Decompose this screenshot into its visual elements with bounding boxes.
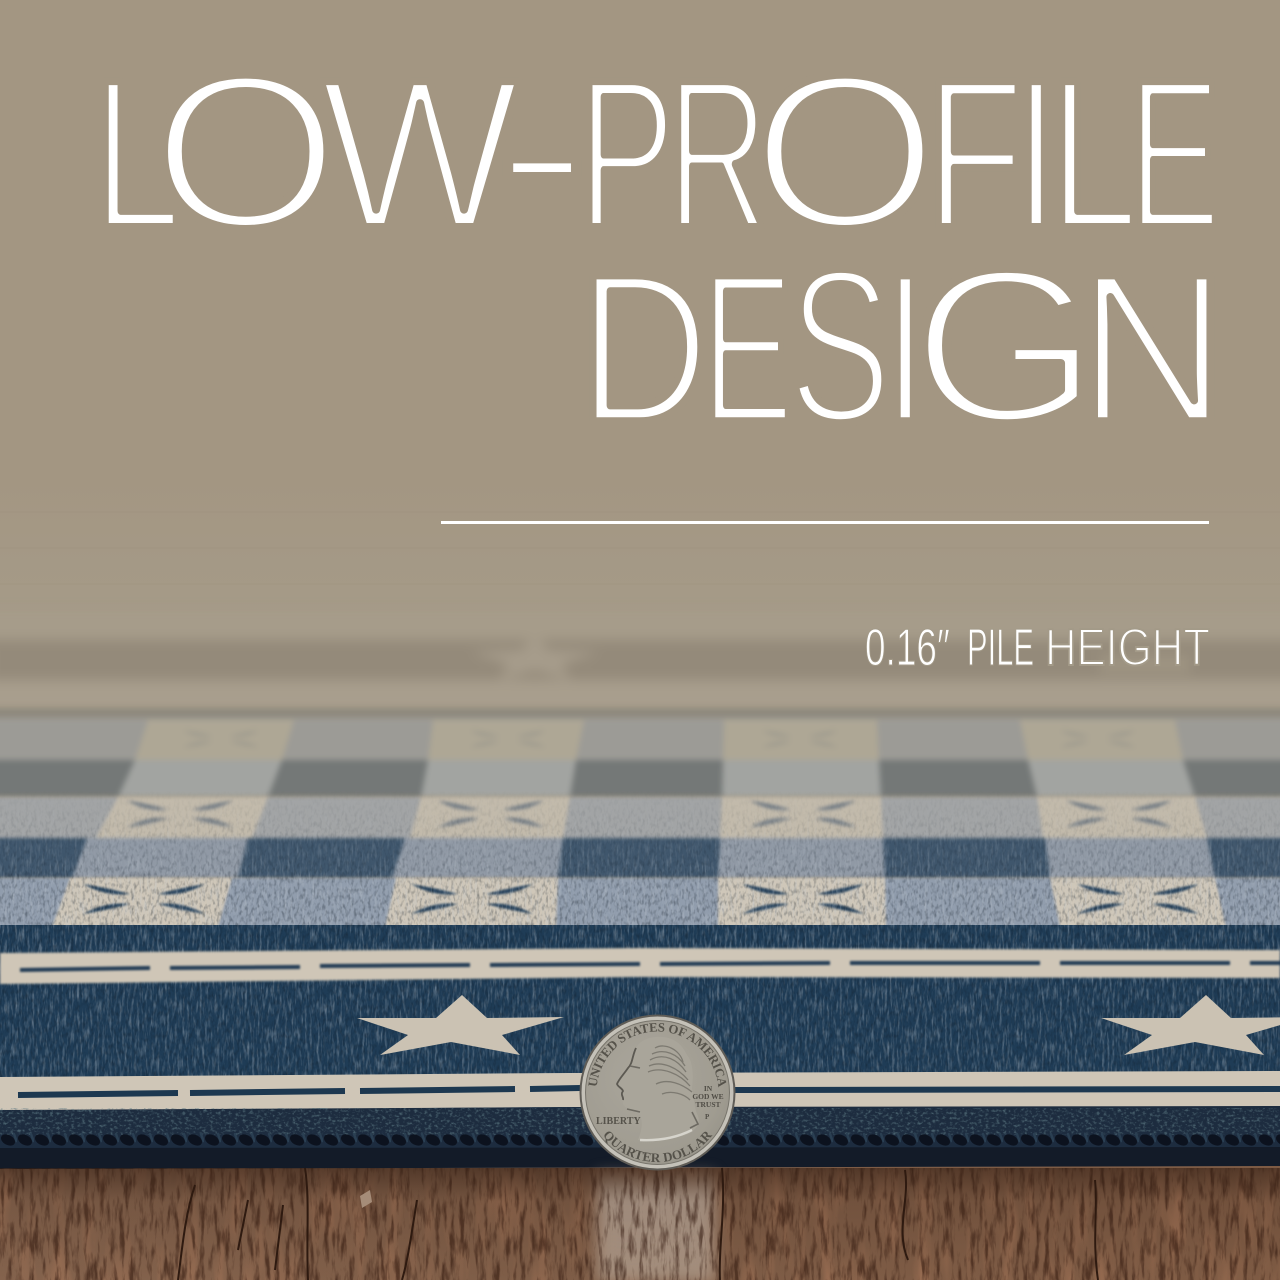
coin legend: motto: GOD WE	[692, 1092, 724, 1101]
title: LOW-PROFILE: W	[320, 35, 520, 272]
title: LOW-PROFILE: -	[496, 32, 589, 269]
star: left	[357, 995, 564, 1055]
rug: stripes and stars	[0, 948, 1280, 1111]
title: LOW-PROFILE	[93, 29, 1220, 274]
rug: checkered row near	[0, 878, 1280, 928]
middle dark squares	[0, 838, 1280, 878]
background: tan wall	[0, 0, 1280, 660]
title: DESIGN: D	[578, 229, 709, 466]
title: LOW-PROFILE: O	[752, 29, 938, 274]
subtitle: pile height	[865, 619, 1210, 677]
subtitle: pile height: 0.16″	[865, 619, 950, 677]
subtitle: pile height: HEIGHT	[1045, 619, 1210, 677]
title: LOW-PROFILE: R	[667, 36, 768, 273]
coin legend: motto: TRUST	[695, 1100, 721, 1109]
divider rule	[441, 521, 1209, 524]
title: DESIGN: G	[912, 224, 1099, 468]
title: DESIGN: E	[701, 229, 793, 466]
title: DESIGN: I	[882, 230, 928, 467]
title: LOW-PROFILE: O	[152, 29, 339, 274]
rug: selvedge binding	[0, 1106, 1280, 1169]
title: LOW-PROFILE: P	[578, 35, 676, 272]
coin legend: liberty: LIBERTY	[596, 1116, 641, 1127]
star: right	[1101, 995, 1280, 1055]
title: LOW-PROFILE: E	[1128, 35, 1220, 272]
coin legend: bottom: QUARTER DOLLAR	[604, 1132, 712, 1162]
title: DESIGN: N	[1077, 229, 1227, 467]
far dark squares	[0, 760, 1280, 797]
subtitle: pile height: PILE	[967, 619, 1034, 677]
near motifs	[83, 884, 1199, 914]
rug: blurred far edge line	[0, 708, 1280, 722]
title: LOW-PROFILE: I	[1013, 36, 1059, 273]
title: LOW-PROFILE: F	[926, 36, 1024, 272]
coin bust	[617, 1037, 699, 1141]
title: LOW-PROFILE: L	[1049, 35, 1138, 272]
rug fabric texture	[0, 780, 1280, 1110]
lower double stripe	[0, 1071, 1280, 1111]
rug: checkered rows far	[0, 718, 1280, 797]
coin legend: top: UNITED STATES OF AMERICA	[588, 1023, 726, 1088]
far motifs	[183, 731, 1136, 747]
upper double stripe	[0, 948, 1280, 984]
rug: checkered rows middle	[0, 797, 1280, 878]
rug: navy field	[0, 925, 1280, 1170]
far cream squares	[135, 720, 1183, 760]
rug: blurred far border	[0, 612, 1280, 712]
coin mint mark: P	[705, 1113, 710, 1121]
wood floor	[0, 1166, 1280, 1280]
title: DESIGN: S	[789, 223, 891, 468]
coin legend: motto: IN	[704, 1084, 713, 1093]
middle cream squares	[96, 797, 1207, 838]
middle motifs	[127, 800, 1172, 828]
title: LOW-PROFILE: L	[93, 35, 181, 272]
selvedge dark underside	[0, 1147, 1280, 1169]
title: DESIGN	[578, 223, 1227, 468]
near cream squares	[52, 878, 1226, 927]
icon: quarter dollar coin	[580, 1014, 736, 1170]
selvedge rope edge	[0, 1131, 1280, 1149]
